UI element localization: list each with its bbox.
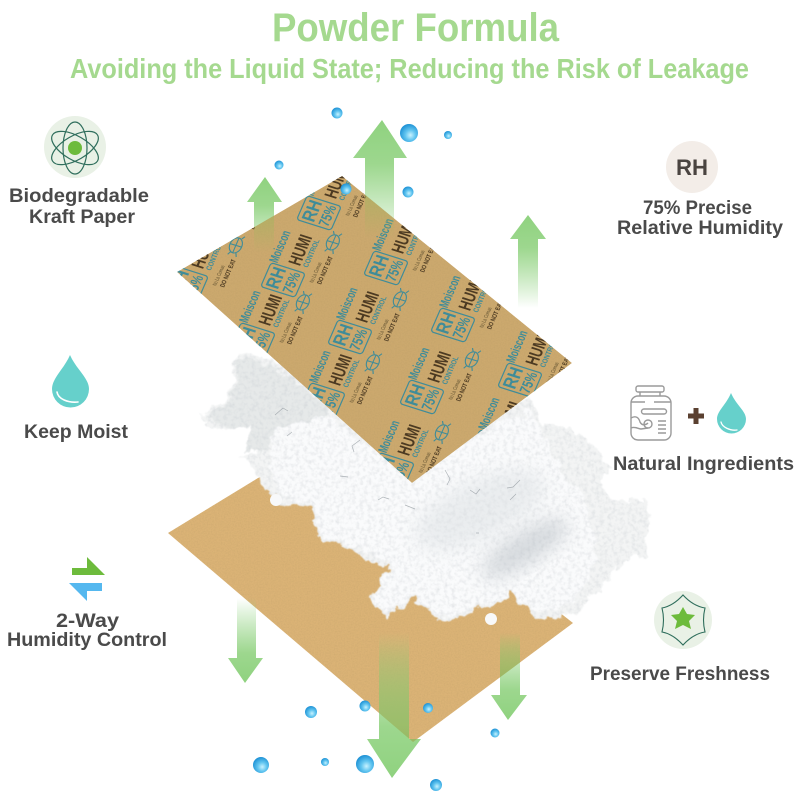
label line 2: Kraft Paper: [29, 207, 136, 228]
print tile 6: [328, 288, 410, 354]
feature: preserve freshness: [590, 591, 770, 685]
print tile 2: 75%: [383, 258, 408, 284]
print tile 4: [498, 331, 569, 396]
print tile 3: HUMI: [454, 277, 486, 313]
print tile 8: Moiscon: [475, 396, 503, 431]
print tile 9: HUMI: [217, 177, 249, 213]
print tile 9: No La Comas: [242, 207, 257, 229]
arrow: down right: [491, 633, 527, 720]
print tile 8: 75%: [489, 437, 514, 463]
print tile 2: CONTROL: [404, 226, 425, 257]
print tile 12: RH: [371, 455, 400, 481]
print tile 10: [238, 290, 312, 354]
print tile 9: 75%: [213, 215, 238, 241]
print tile 5: Moiscon: [266, 229, 294, 264]
print tile 8: DO NOT EAT: [525, 423, 544, 452]
arrow tint on paper: left: [254, 216, 274, 240]
print tile 11: DO NOT EAT: [356, 376, 375, 405]
print tile 13: [177, 236, 246, 294]
powder: outer fringe: [200, 352, 648, 623]
print tile 11: Moiscon: [306, 349, 334, 384]
powder: [200, 352, 648, 625]
print tile 4: Moiscon: [503, 329, 531, 364]
powder: loose clumps: [270, 494, 497, 625]
print tile 13: No La Comas: [212, 265, 227, 287]
icon: RH badge: RH: [676, 155, 708, 180]
print tile 5: No La Comas: [309, 262, 324, 284]
print tile 7: DO NOT EAT: [455, 373, 474, 402]
print tile 3: CONTROL: [471, 283, 492, 314]
print tile 9: Moiscon: [199, 174, 227, 209]
print tile 2: [364, 219, 434, 286]
print tile 10: DO NOT EAT: [286, 316, 305, 345]
water droplets: bottom: [253, 700, 500, 791]
label: Keep Moist: [24, 422, 129, 443]
print tile 6: RH: [329, 322, 358, 348]
feature: 2-way humidity control: [7, 557, 167, 651]
print tile 5: HUMI: [284, 232, 316, 268]
arrow: down centre: [367, 632, 421, 778]
print tile 2: RH: [365, 253, 394, 279]
water droplets: top: [274, 108, 452, 198]
print tile 10: 75%: [250, 330, 275, 356]
print tile 12: No La Comas: [418, 452, 433, 474]
print tile 4: CONTROL: [538, 338, 559, 369]
feature: natural ingredients: [613, 386, 794, 475]
print tile 12: CONTROL: [410, 428, 431, 459]
feature: biodegradable kraft paper: [9, 116, 149, 228]
print tile 2: DO NOT EAT: [419, 244, 438, 273]
feature: keep moist: [24, 355, 129, 443]
print tile 10: Moiscon: [236, 289, 264, 324]
print tile 1: DO NOT EAT: [352, 189, 371, 218]
bottom kraft paper: [168, 440, 573, 742]
print tile 13: CONTROL: [204, 241, 225, 272]
top kraft paper with printed pattern: [177, 176, 572, 483]
print tile 2: HUMI: [387, 220, 419, 256]
print tile 5: 75%: [280, 270, 305, 296]
print tile 9: RH: [195, 210, 224, 236]
print tile 3: [431, 276, 502, 342]
print tile 6: 75%: [347, 327, 372, 353]
powder: grey upper-left part: [205, 360, 330, 455]
print tile 8: [478, 398, 518, 434]
print tile 1: No La Comas: [345, 195, 360, 217]
print tile 5: DO NOT EAT: [316, 256, 335, 285]
arrow tint on paper: centre: [365, 195, 394, 232]
print tile 2: No La Comas: [412, 250, 427, 272]
print tile 11: CONTROL: [341, 358, 362, 389]
powder: cracks: [275, 408, 520, 533]
print tile 6: Moiscon: [333, 286, 361, 321]
print tile 6: CONTROL: [368, 295, 389, 326]
print tile 4: No La Comas: [546, 362, 561, 384]
print tile 3: 75%: [450, 315, 475, 341]
powder: mid shading: [404, 453, 556, 567]
icon: RH badge: [666, 141, 718, 193]
print tile 4: DO NOT EAT: [553, 356, 572, 385]
print tile 11: [308, 350, 382, 416]
print tile 1: 75%: [316, 203, 341, 229]
print tile 4: RH: [499, 365, 528, 391]
print tile 8: No La Comas: [518, 429, 533, 451]
print tile 10: HUMI: [254, 292, 286, 328]
print tile 10: No La Comas: [279, 322, 294, 344]
print tile 12: [378, 420, 452, 480]
print tile 11: No La Comas: [349, 382, 364, 404]
print tile 3: DO NOT EAT: [486, 301, 505, 330]
print tile 9: DO NOT EAT: [249, 201, 268, 230]
icon: star badge: [654, 591, 712, 649]
arrow: up right: [510, 215, 546, 308]
print tile 13: HUMI: [187, 235, 219, 271]
print tile 5: CONTROL: [301, 238, 322, 269]
arrow: up left: [247, 177, 282, 258]
print tile 7: [400, 348, 482, 414]
print tile 6: No La Comas: [376, 319, 391, 341]
print tile 1: [297, 176, 366, 230]
print tile 13: RH: [165, 268, 194, 294]
print tile 1: CONTROL: [337, 171, 358, 202]
print tile 11: 75%: [320, 390, 345, 416]
print tile 7: 75%: [419, 387, 444, 413]
print tile 11: RH: [302, 385, 331, 411]
print tile 4: 75%: [517, 370, 542, 396]
print tile 8: CONTROL: [510, 405, 531, 436]
print tile 12: 75%: [389, 460, 414, 486]
label: Preserve Freshness: [590, 664, 770, 685]
print tile 13: 75%: [183, 273, 208, 299]
subtitle: Avoiding the Liquid State; Reducing the Risk of Leakage: [70, 53, 749, 84]
print tile 11: HUMI: [324, 352, 356, 388]
label line 2: Relative Humidity: [617, 218, 783, 239]
icon: plus: [688, 408, 704, 424]
arrow tint on bottom paper: [379, 643, 520, 742]
label: Biodegradable: [9, 186, 149, 207]
print tile 13: Moiscon: [169, 232, 197, 267]
icon: jar: [631, 386, 671, 440]
print tile 5: [261, 230, 342, 298]
print tile 3: Moiscon: [436, 274, 464, 309]
powder: grey shading: [474, 508, 576, 588]
arrow: up centre: [353, 120, 407, 245]
label: 75% Precise: [643, 198, 752, 219]
feature: 75% relative humidity: [617, 141, 783, 239]
print tile 7: RH: [401, 382, 430, 408]
print tile 8: RH: [471, 432, 500, 458]
print tile 3: No La Comas: [479, 307, 494, 329]
print tile 7: No La Comas: [448, 379, 463, 401]
print tile 6: HUMI: [351, 289, 383, 325]
title: Powder Formula: [272, 6, 560, 50]
print tile 7: HUMI: [423, 349, 455, 385]
print tile 9: [252, 226, 255, 230]
arrow: down left: [228, 598, 263, 683]
print tile 7: CONTROL: [440, 355, 461, 386]
label: Natural Ingredients: [613, 454, 794, 475]
print tile 12: Moiscon: [375, 419, 403, 454]
print tile 1: Moiscon: [302, 162, 330, 197]
print tile 5: RH: [262, 265, 291, 291]
label: 2-Way: [56, 611, 119, 632]
print tile 10: RH: [232, 325, 261, 351]
print tile 1: HUMI: [320, 165, 352, 201]
print tile 8: HUMI: [493, 399, 525, 435]
print tile 2: Moiscon: [369, 217, 397, 252]
icon: two-way arrows: [69, 557, 105, 601]
print tile 9: CONTROL: [234, 183, 255, 214]
print tile 13: DO NOT EAT: [219, 259, 238, 288]
print tile 7: Moiscon: [405, 346, 433, 381]
print tile 10: CONTROL: [271, 298, 292, 329]
print tile 6: DO NOT EAT: [383, 313, 402, 342]
label line 2: Humidity Control: [7, 630, 167, 651]
print tile 1: RH: [298, 198, 327, 224]
icon: water drop: [717, 393, 746, 434]
print tile 12: DO NOT EAT: [425, 446, 444, 475]
icon: water drop: [52, 355, 89, 408]
print tile 4: HUMI: [521, 332, 553, 368]
powder: white centre: [270, 410, 598, 618]
icon: atom: [44, 116, 106, 178]
print tile 3: RH: [432, 310, 461, 336]
print tile 12: HUMI: [393, 422, 425, 458]
